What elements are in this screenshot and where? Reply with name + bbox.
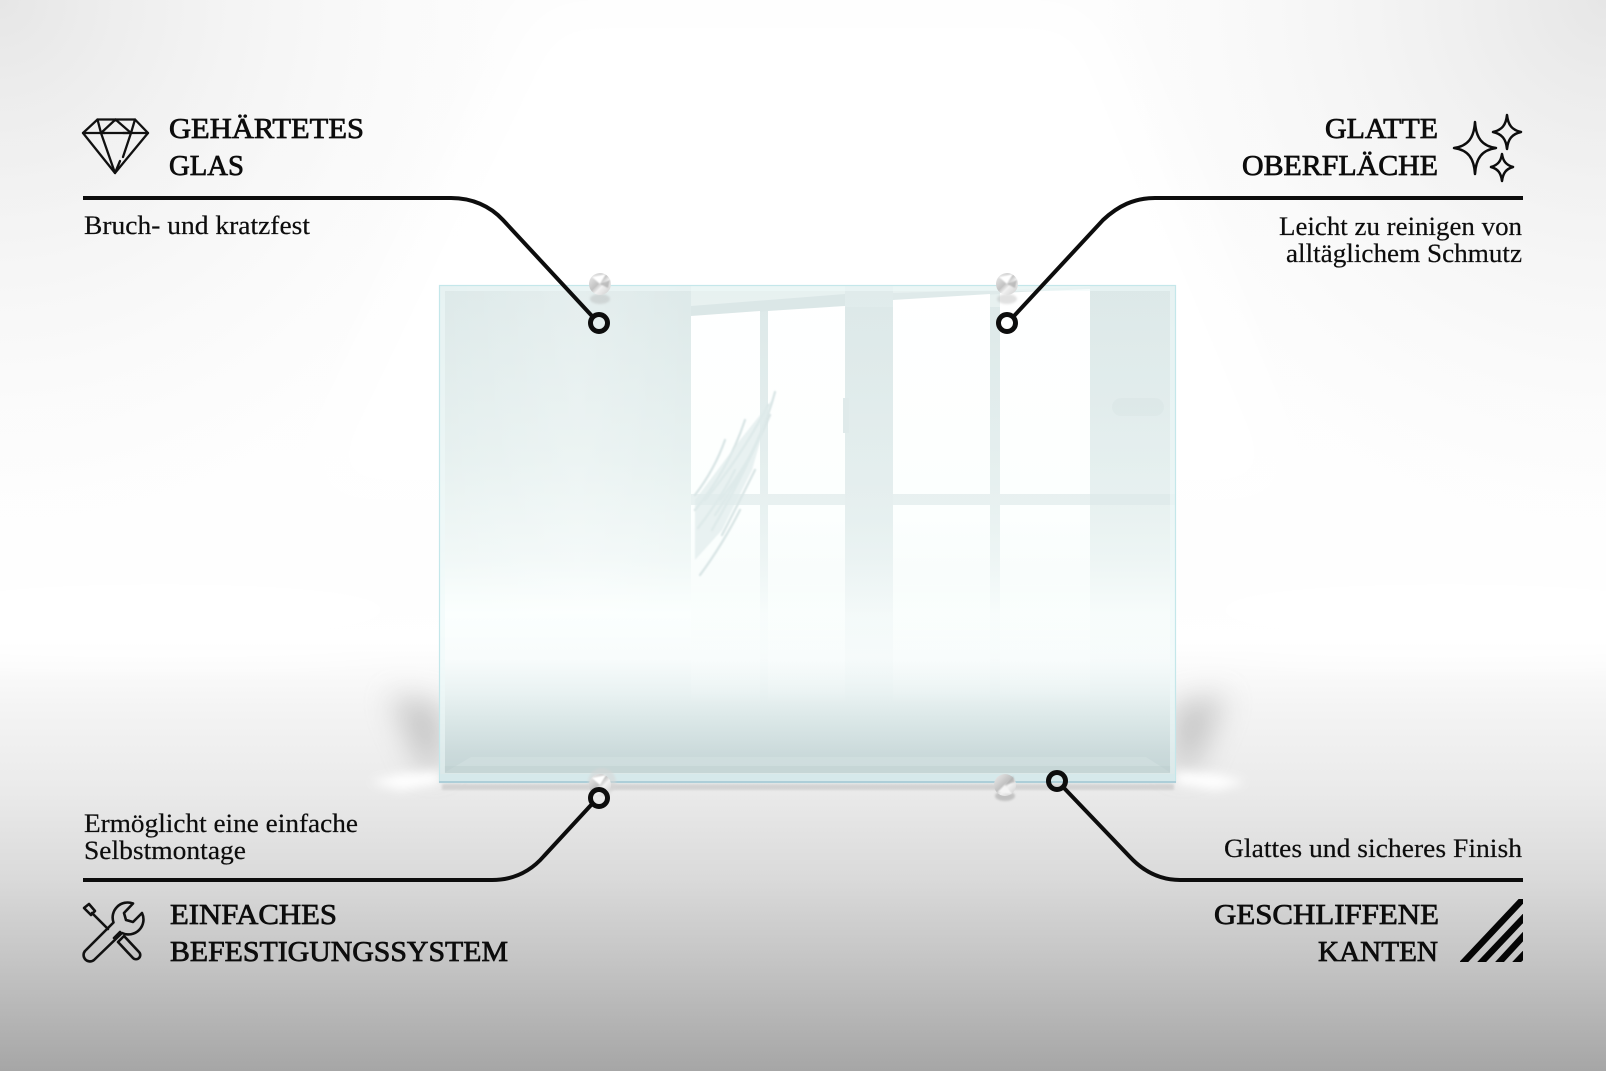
leader line (83, 790, 608, 880)
heading: Einfaches Befestigungssystem (170, 899, 508, 968)
callout: top left feature (83, 113, 608, 332)
icon: sparkles (1454, 115, 1521, 181)
callout: bottom right feature (1048, 772, 1530, 968)
heading: Glatte Oberfläche: OBERFLÄCHE (1242, 150, 1438, 182)
text: description: Ermöglicht eine einfache (84, 808, 358, 838)
glass floor shadows and light flares (370, 695, 1246, 790)
icon: wrench and screwdriver (84, 903, 143, 961)
heading: Geschliffene Kanten (1214, 899, 1439, 968)
heading: Einfaches Befestigungssystem: EINFACHES (170, 899, 337, 931)
window reflection (691, 289, 1170, 560)
leader line (1048, 772, 1523, 880)
heading: Einfaches Befestigungssystem: BEFESTIGUNGSSYSTEM (170, 936, 508, 968)
bolt bottom right (994, 774, 1016, 801)
bolt top left (589, 273, 611, 304)
top slanted bar (691, 294, 845, 307)
icon: diamond (83, 120, 148, 173)
text: description: Leicht zu reinigen von (1279, 211, 1522, 241)
heading: Gehärtetes Glas: GLAS (169, 150, 244, 182)
callout: top right feature (998, 113, 1523, 332)
heading: Glatte Oberfläche (1242, 113, 1438, 182)
glass panel with window reflection (439, 285, 1176, 783)
text: description: Glattes und sicheres Finish (1224, 833, 1522, 863)
text: description: Bruch- und kratzfest (84, 210, 311, 240)
text: description (1279, 211, 1522, 268)
bolt bottom left (588, 768, 616, 796)
callout: bottom left feature (83, 790, 608, 968)
leader line (83, 198, 608, 332)
bolt top right (996, 273, 1018, 304)
leader line (998, 198, 1523, 332)
plant reflection (695, 392, 775, 575)
heading: Gehärtetes Glas (169, 113, 364, 182)
heading: Geschliffene Kanten: GESCHLIFFENE (1214, 899, 1439, 931)
bottom bevel (444, 757, 1171, 773)
icon: ground edge stripes (1460, 899, 1523, 962)
text: description (84, 808, 358, 865)
text: description: Selbstmontage (84, 835, 246, 865)
heading: Gehärtetes Glas: GEHÄRTETES (169, 113, 364, 145)
glass edge (442, 288, 1173, 776)
heading: Glatte Oberfläche: GLATTE (1325, 113, 1438, 145)
text: description: alltäglichem Schmutz (1286, 238, 1522, 268)
mounting bolts (588, 273, 1018, 801)
heading: Geschliffene Kanten: KANTEN (1318, 936, 1438, 968)
